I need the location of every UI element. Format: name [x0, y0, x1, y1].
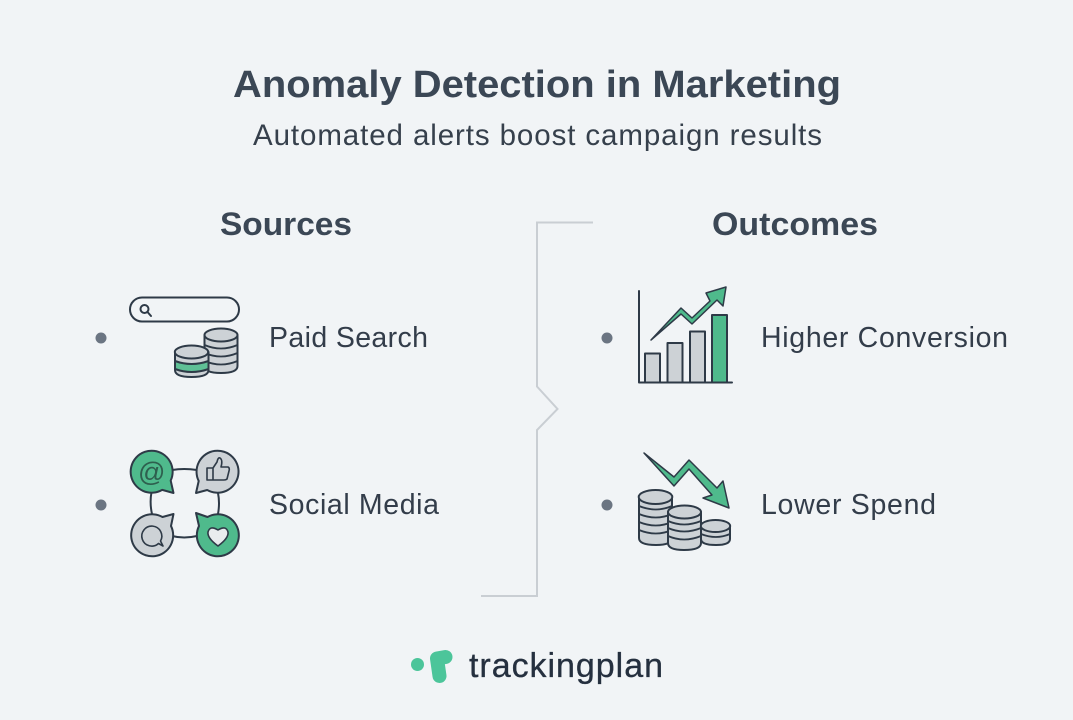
- icon: social network bubbles: @: [138, 457, 165, 487]
- title: Anomaly Detection in Marketing: [233, 64, 841, 106]
- bullet: social media: [96, 500, 106, 510]
- bullet: lower spend: [602, 500, 612, 510]
- icon: falling arrow with coins: [639, 453, 730, 550]
- logo mark: [411, 657, 446, 676]
- icon: social network bubbles: [131, 451, 239, 556]
- icon: search bar with coins: [130, 298, 239, 377]
- subtitle: Automated alerts boost campaign results: [253, 119, 822, 152]
- bullet: higher conversion: [602, 332, 612, 344]
- bullet: paid search: [96, 332, 106, 344]
- logo wordmark: trackingplan: [469, 647, 663, 685]
- heading: outcomes: Outcomes: [712, 206, 878, 242]
- icon: rising bar chart: [639, 287, 732, 382]
- heading: sources: Sources: [220, 206, 352, 242]
- label: social media: Social Media: [269, 489, 439, 521]
- label: higher conversion: Higher Conversion: [761, 322, 1008, 354]
- bracket connector: [481, 222, 593, 596]
- label: lower spend: Lower Spend: [761, 489, 936, 521]
- label: paid search: Paid Search: [269, 322, 428, 354]
